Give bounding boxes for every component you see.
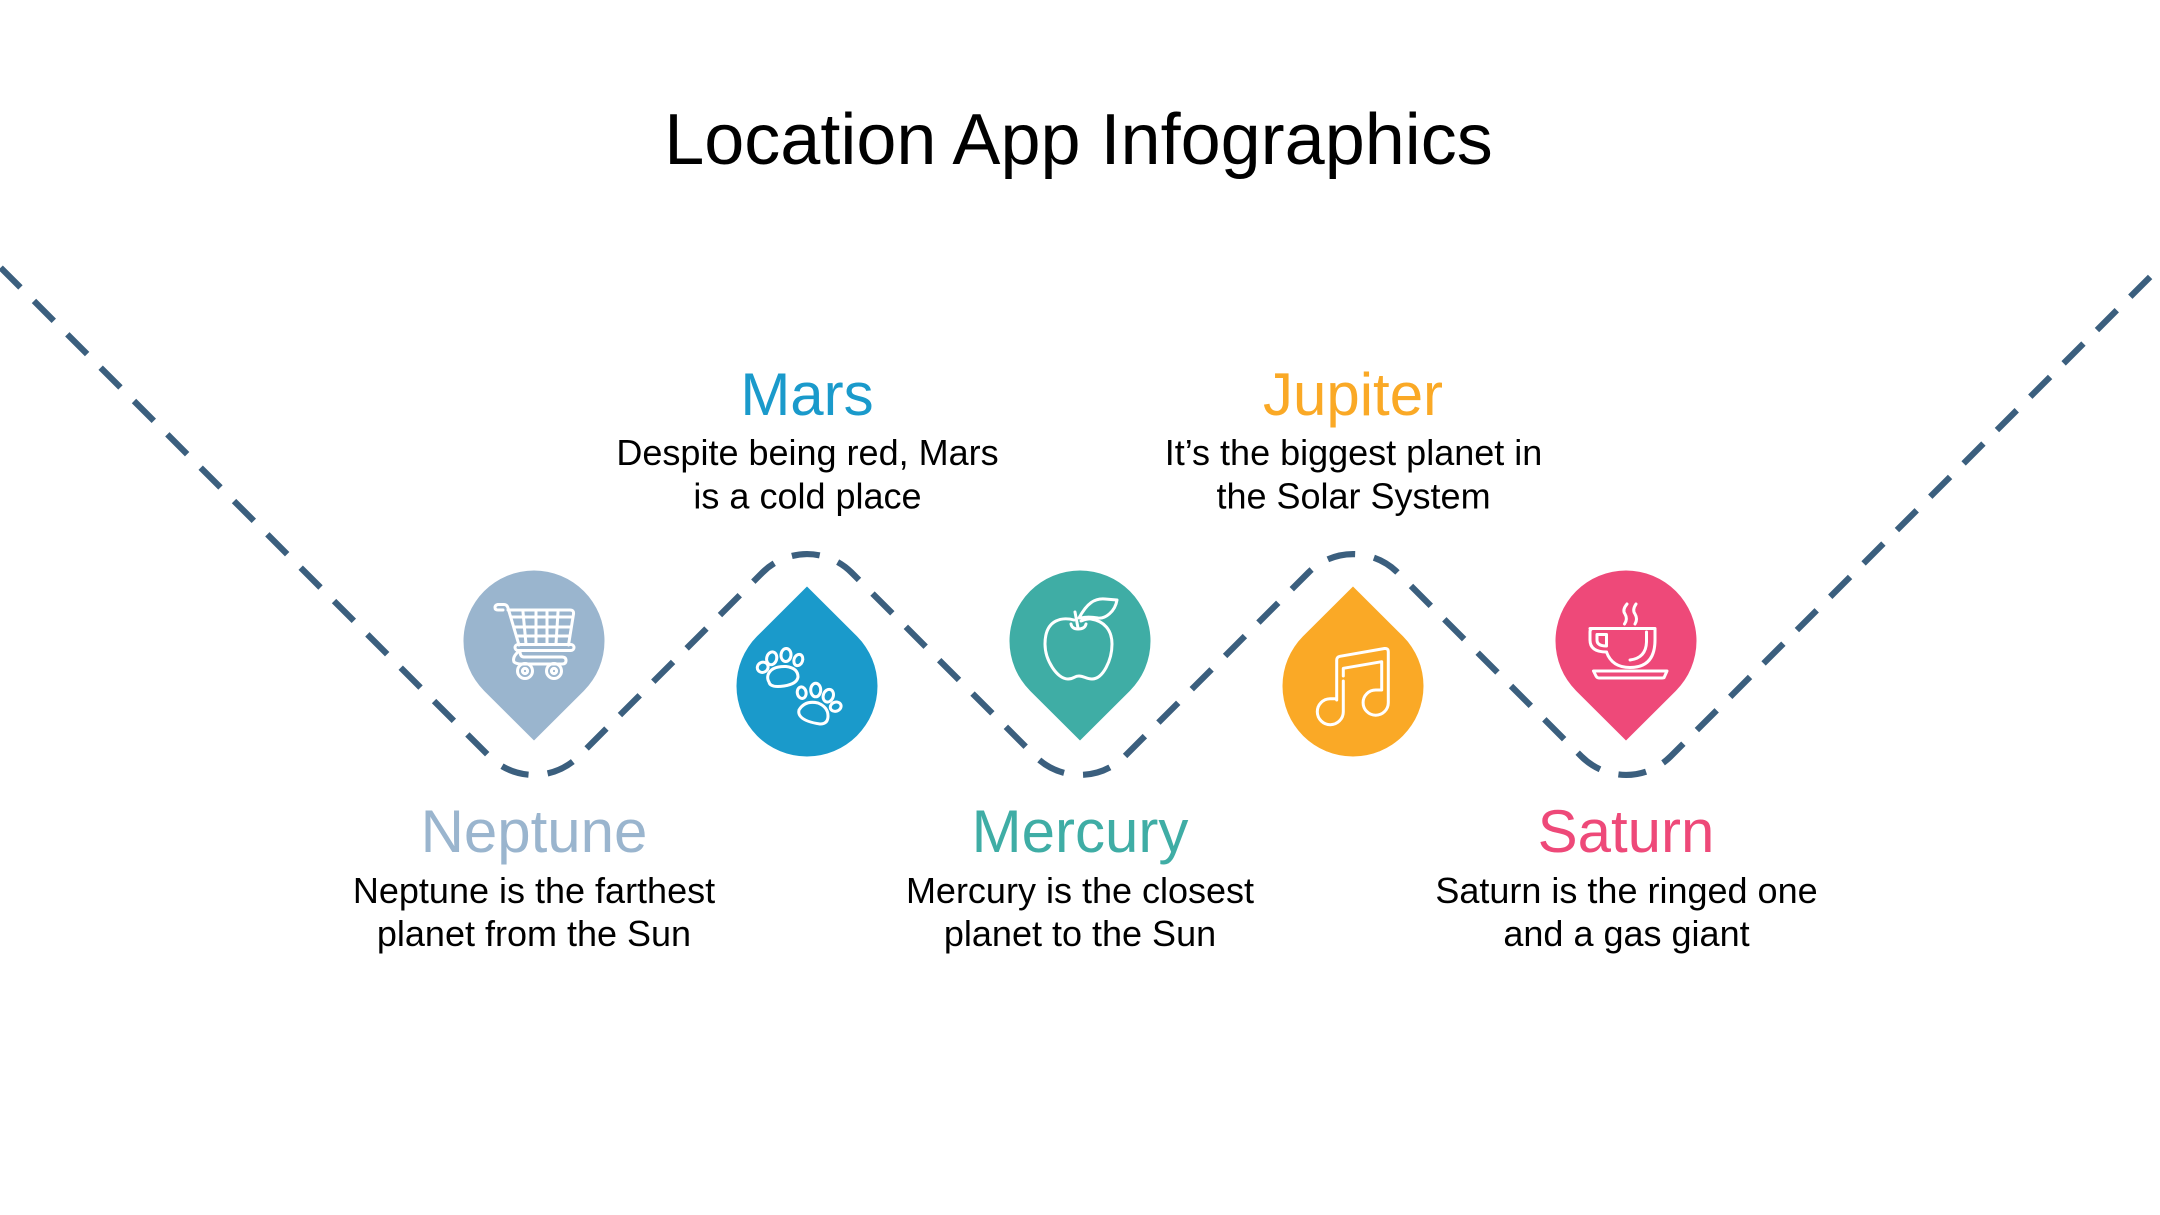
icon: paw prints [755,648,842,724]
heading: Mercury: Mercury [972,798,1188,865]
text: Neptune description: planet from the Sun [377,913,691,954]
icon: apple [1045,599,1117,679]
heading: Jupiter: Jupiter [1263,361,1443,428]
panel: Jupiter [1165,361,1542,757]
panel: Mars [616,361,999,757]
dashed route line [0,267,2160,775]
text: Saturn description: and a gas giant [1503,913,1750,954]
text: Saturn description: Saturn is the ringed one [1435,870,1818,911]
panel: Neptune [353,570,715,954]
text: Mercury description: planet to the Sun [944,913,1216,954]
text: Jupiter description: the Solar System [1216,475,1491,516]
text: Neptune description: Neptune is the farthest [353,870,715,911]
heading: Mars: Mars [740,361,874,428]
pin: Jupiter [1282,586,1423,757]
pin: Neptune [463,570,604,740]
pin: Mercury [1009,570,1150,740]
panel: Mercury [906,570,1254,954]
text: Mars description: Despite being red, Mars [616,432,999,473]
icon: shopping cart [495,604,574,678]
title: Location App Infographics [664,100,1493,180]
text: Mercury description: Mercury is the closest [906,870,1254,911]
pin: Saturn [1556,570,1696,740]
heading: Neptune: Neptune [421,798,647,865]
icon: coffee cup [1590,604,1667,678]
text: Jupiter description: It’s the biggest planet in [1165,432,1542,473]
pin: Mars [736,586,877,757]
icon: music notes [1317,648,1388,725]
heading: Saturn: Saturn [1538,798,1714,865]
text: Mars description: is a cold place [693,475,922,516]
panel: Saturn [1435,570,1818,954]
